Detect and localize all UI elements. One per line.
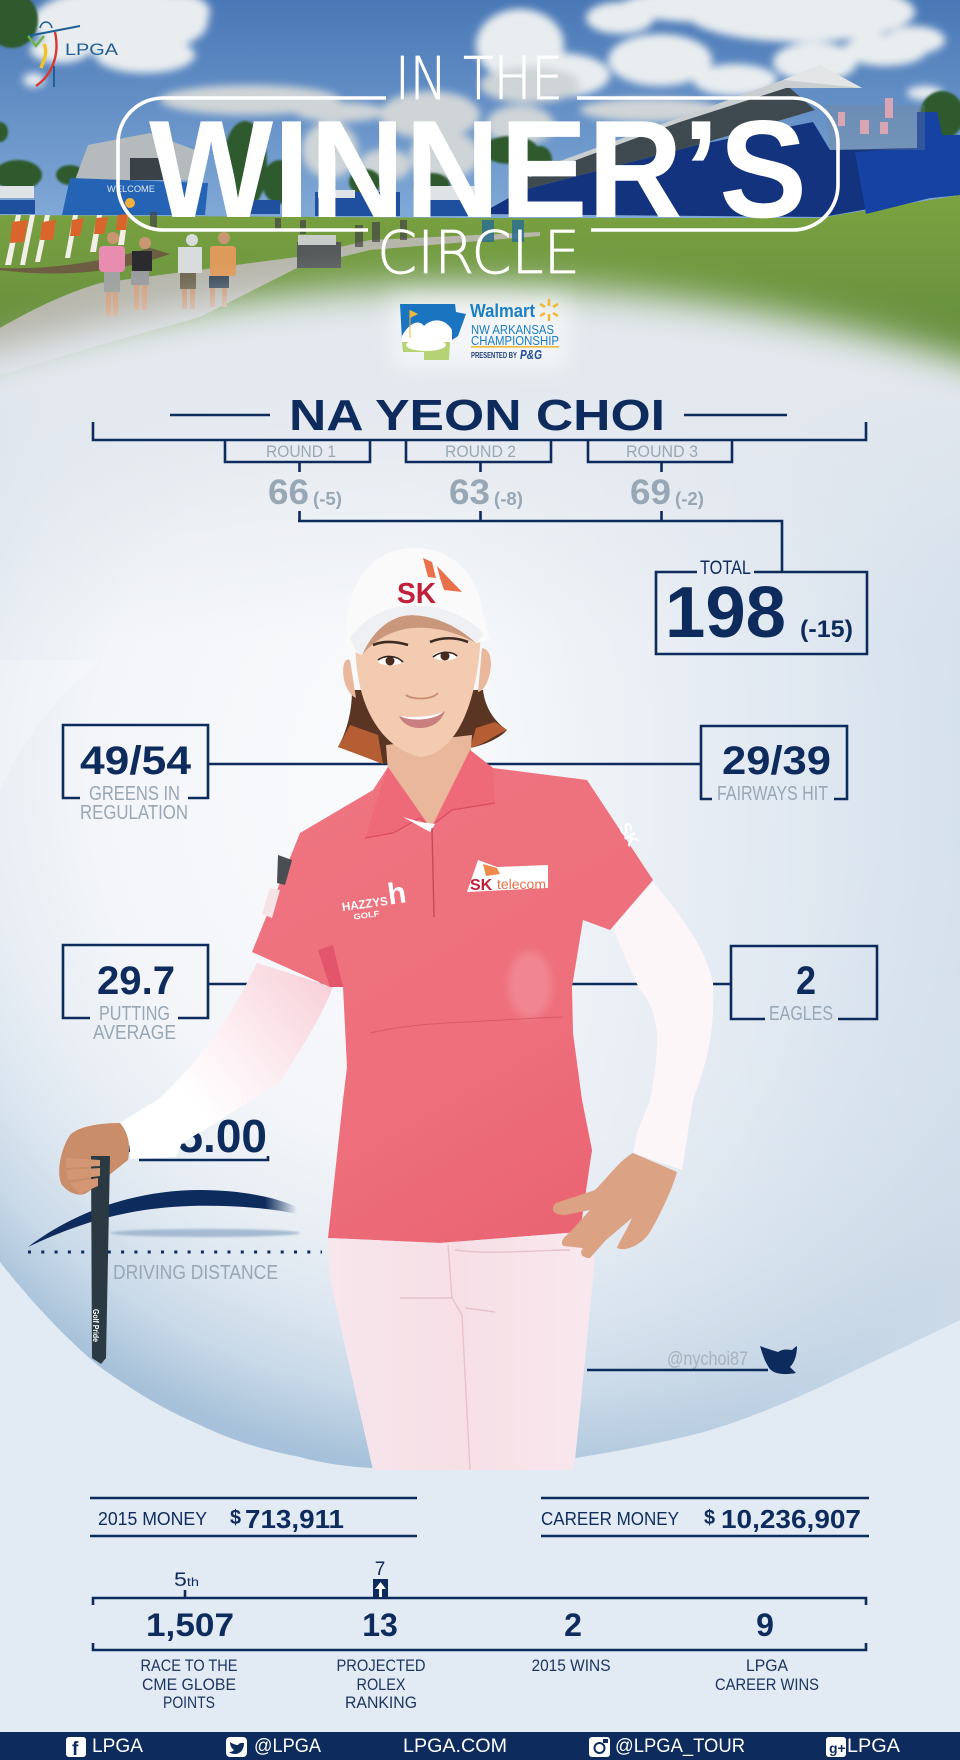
blue wall with Walmart banner: WELCOME	[107, 184, 155, 194]
rounds panel: (-8)	[494, 489, 523, 509]
rolex previous rank: 7	[375, 1559, 385, 1580]
name: NA YEON CHOI	[289, 391, 665, 440]
footer bar: @LPGA_TOUR	[615, 1736, 745, 1757]
rounds panel: (-5)	[313, 489, 342, 509]
horizon trees	[0, 0, 960, 209]
twitter handle	[587, 1346, 797, 1374]
footer bar: LPGA	[847, 1736, 900, 1757]
stat: greens in regulation	[63, 725, 400, 824]
nose	[406, 693, 438, 699]
stat: greens in regulation: GREENS IN	[89, 783, 180, 805]
stat: putting average: AVERAGE	[93, 1022, 176, 1044]
rounds panel: 63	[449, 473, 490, 512]
season stats row: 2	[564, 1607, 582, 1643]
icon: facebook: f	[72, 1739, 79, 1760]
total score box: TOTAL	[700, 558, 751, 579]
cap	[346, 548, 490, 655]
stat: fairways hit: 29/39	[722, 739, 831, 783]
label: race	[140, 1657, 238, 1712]
golf cart	[297, 235, 341, 268]
spectators	[99, 212, 524, 316]
hand on hip	[553, 1153, 677, 1258]
neck	[386, 735, 472, 830]
background circle	[0, 477, 960, 1468]
event logo: Walmart NW Arkansas Championship: Walmart	[470, 301, 535, 321]
season stats row: 1,507	[146, 1607, 234, 1643]
label: rolex: ROLEX	[356, 1676, 406, 1694]
label: race: POINTS	[163, 1694, 215, 1712]
icon: twitter	[226, 1737, 247, 1757]
rounds panel: ROUND 1	[266, 442, 336, 461]
season stats row: 13	[362, 1607, 398, 1643]
distant stands	[0, 192, 480, 216]
2015 money: 2015 MONEY	[98, 1509, 207, 1529]
logo: Hazzys Golf: HAZZYS	[341, 894, 389, 914]
rounded frame	[118, 98, 838, 230]
stat: greens in regulation: 49/54	[80, 739, 192, 783]
stat: fairways hit: FAIRWAYS HIT	[717, 783, 828, 805]
event logo: Walmart NW Arkansas Championship: NW ARKANSAS	[471, 322, 554, 337]
career money: $	[704, 1507, 715, 1529]
label: career wins	[715, 1657, 819, 1694]
player figure	[59, 548, 713, 1470]
drive arc	[28, 1190, 297, 1247]
stat: eagles	[570, 946, 877, 1025]
career money: CAREER MONEY	[541, 1509, 679, 1529]
title line: in the: IN THE	[395, 44, 563, 113]
player name with bracket	[93, 391, 866, 440]
club grip: Golf Pride	[91, 1309, 100, 1342]
logo: SK telecom	[467, 860, 548, 894]
twitter handle: @nychoi87	[667, 1349, 748, 1370]
logo: SK telecom: telecom	[497, 876, 546, 892]
event logo: Walmart NW Arkansas Championship: P&G	[520, 347, 542, 362]
footer bar: @LPGA	[254, 1736, 321, 1757]
label: rolex	[336, 1657, 426, 1712]
left sleeve arm	[120, 963, 333, 1159]
footer bar	[0, 1732, 960, 1760]
pants folds	[400, 1245, 570, 1470]
eyes and brows	[373, 638, 468, 666]
clouds	[23, 0, 945, 181]
logo: Hazzys Golf: GOLF	[353, 909, 380, 922]
rounds panel: 69	[630, 473, 671, 512]
walkway	[0, 232, 540, 375]
label: race: CME GLOBE	[142, 1676, 236, 1694]
stat: greens in regulation: REGULATION	[80, 802, 188, 824]
mouth	[399, 711, 445, 728]
event logo: Walmart NW Arkansas Championship	[392, 296, 568, 368]
pants	[328, 1232, 595, 1470]
hair back	[338, 690, 507, 764]
shirt details	[262, 750, 563, 1033]
cap: SK	[397, 578, 436, 610]
label: career wins: LPGA	[746, 1657, 788, 1675]
sleeve mark: SK	[615, 819, 643, 850]
icon: twitter bird	[760, 1346, 797, 1374]
right sleeve arm	[613, 882, 713, 1170]
race rank: 5th	[174, 1570, 199, 1591]
header photo: golf course scene	[0, 0, 960, 390]
LPGA logo: LPGA	[65, 40, 119, 59]
logo: Hazzys Golf	[339, 876, 409, 923]
icon: google plus	[826, 1737, 846, 1757]
stat: driving distance: 255.00	[126, 1110, 267, 1162]
event logo: Walmart NW Arkansas Championship: CHAMPIONSHIP	[471, 333, 559, 348]
label: race: RACE TO THE	[140, 1657, 238, 1675]
shirt	[252, 750, 653, 1243]
total score box: 198	[665, 573, 786, 653]
icon: up arrow	[373, 1579, 388, 1598]
total score box	[656, 558, 867, 654]
forehead shadow	[362, 615, 476, 655]
career money: 10,236,907	[721, 1504, 861, 1534]
icon: google plus: g+	[829, 1740, 846, 1756]
stat: eagles: EAGLES	[769, 1003, 833, 1025]
LPGA logo	[28, 22, 119, 87]
stat: driving distance	[28, 1110, 322, 1284]
blue wall with Walmart banner	[62, 178, 208, 215]
grandstand	[480, 65, 960, 217]
rounds panel: 66	[268, 473, 309, 512]
footer bar: LPGA	[92, 1736, 143, 1757]
career money	[541, 1498, 869, 1536]
rounds panel: (-2)	[675, 489, 704, 509]
tent	[75, 133, 200, 180]
2015 money: $	[230, 1507, 241, 1529]
title	[118, 44, 838, 287]
ears	[343, 648, 491, 698]
logo: SK telecom: SK	[470, 877, 493, 894]
logo: Hazzys Golf: h	[386, 876, 408, 912]
stat: putting average: 29.7	[97, 959, 175, 1003]
label: wins: 2015 WINS	[532, 1657, 610, 1675]
title line: winner's: WINNER’S	[149, 92, 807, 247]
label: rolex: RANKING	[345, 1694, 417, 1712]
sky	[0, 0, 960, 240]
rounds panel	[225, 441, 782, 572]
icon: instagram	[589, 1737, 610, 1757]
title line: circle: CIRCLE	[377, 218, 580, 287]
icon: facebook	[66, 1737, 86, 1760]
event logo: Walmart NW Arkansas Championship: PRESENTED BY	[471, 351, 517, 360]
stat: fairways hit	[480, 726, 847, 805]
sign posts	[5, 214, 128, 265]
season stats row	[93, 1559, 866, 1712]
2015 money: 713,911	[245, 1504, 344, 1534]
stat: putting average	[63, 945, 345, 1044]
label: career wins: CAREER WINS	[715, 1676, 819, 1694]
club grip	[59, 1123, 129, 1364]
stat: eagles: 2	[796, 959, 816, 1003]
stat: putting average: PUTTING	[99, 1003, 170, 1025]
grass	[0, 195, 960, 390]
season stats row: 9	[756, 1607, 774, 1643]
label: rolex: PROJECTED	[336, 1657, 426, 1675]
total score box: (-15)	[800, 616, 853, 643]
face	[356, 609, 481, 757]
footer bar: LPGA.COM	[403, 1736, 507, 1757]
rounds panel: ROUND 2	[445, 442, 516, 461]
stat: driving distance: DRIVING DISTANCE	[113, 1262, 278, 1284]
rounds panel: ROUND 3	[626, 442, 698, 461]
2015 money	[90, 1498, 417, 1536]
